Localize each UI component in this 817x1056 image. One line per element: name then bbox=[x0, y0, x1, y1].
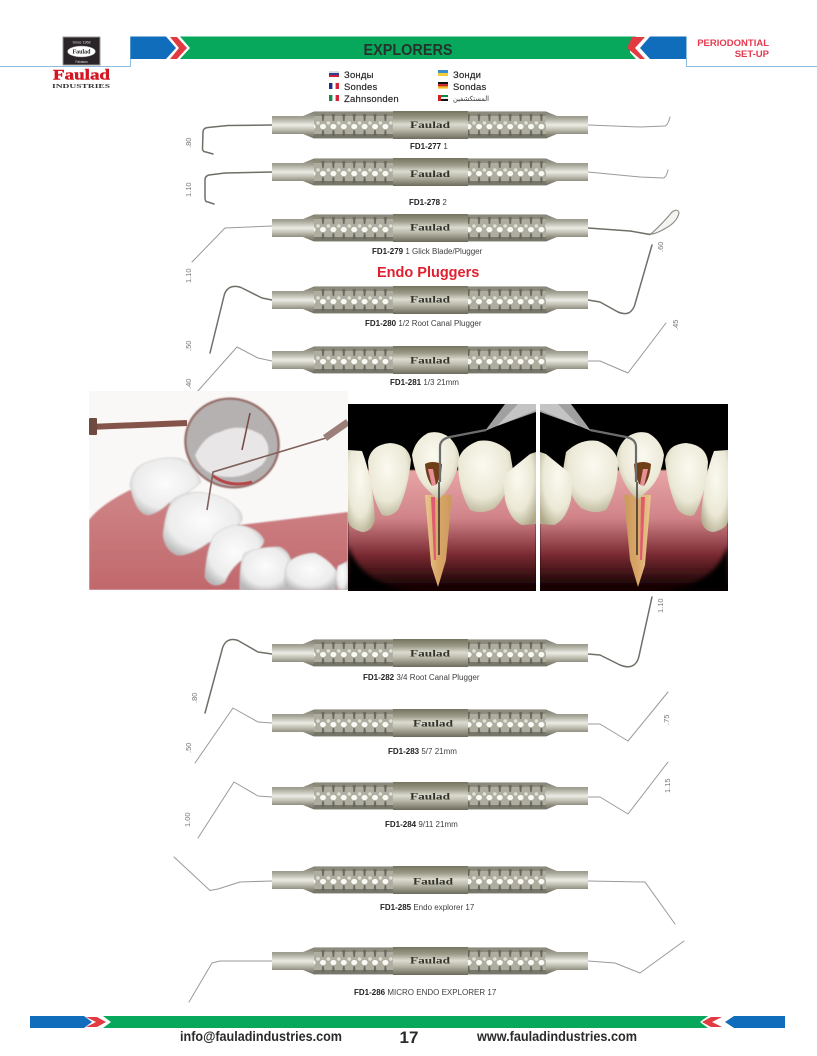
instrument FD1-282: Faulad bbox=[410, 650, 451, 660]
label: Ukrainian: Зонди bbox=[453, 70, 481, 81]
dimension 1.10: 1.10 bbox=[184, 268, 193, 283]
dimension .80: .80 bbox=[184, 138, 193, 148]
instrument FD1-283 bbox=[195, 692, 668, 763]
caption FD1-282: FD1-282 3/4 Root Canal Plugger bbox=[363, 673, 480, 682]
caption FD1-277: FD1-277 1 bbox=[410, 142, 448, 151]
logo badge: Pakistan bbox=[75, 60, 88, 64]
logo badge: Faulad bbox=[72, 50, 91, 56]
reflected probe tip bbox=[242, 413, 250, 450]
dimension 1.10: 1.10 bbox=[656, 598, 665, 613]
legend: translations bbox=[329, 70, 489, 105]
caption FD1-286: FD1-286 MICRO ENDO EXPLORER 17 bbox=[354, 988, 497, 997]
instrument FD1-278 bbox=[205, 158, 668, 204]
photo: dental mirror and explorer on molars bbox=[89, 386, 348, 590]
dimension 1.15: 1.15 bbox=[663, 778, 672, 793]
page number: 17 bbox=[400, 1028, 418, 1047]
molar teeth bbox=[130, 458, 348, 590]
caption FD1-280: FD1-280 1/2 Root Canal Plugger bbox=[365, 319, 482, 328]
instrument FD1-282 bbox=[205, 597, 652, 713]
logo subtitle: INDUSTRIES bbox=[52, 83, 111, 90]
dimension .45: .45 bbox=[671, 320, 680, 330]
flag: France bbox=[329, 83, 339, 89]
caption FD1-279: FD1-279 1 Glick Blade/Plugger bbox=[372, 247, 483, 256]
flag: Italy bbox=[329, 95, 339, 101]
mirror reflection bbox=[195, 428, 268, 477]
logo badge: Since 1968 bbox=[73, 40, 90, 44]
instrument FD1-281: Faulad bbox=[410, 356, 451, 366]
dimension .50: .50 bbox=[184, 341, 193, 351]
dimension 1.10: 1.10 bbox=[184, 182, 193, 197]
flag: Ukraine bbox=[438, 70, 448, 76]
instrument FD1-277 bbox=[202, 111, 670, 154]
caption FD1-278: FD1-278 2 bbox=[409, 198, 447, 207]
instrument FD1-280: Faulad bbox=[410, 296, 451, 306]
header band right bbox=[626, 36, 817, 66]
instrument FD1-284 bbox=[198, 762, 668, 838]
mirror bbox=[183, 396, 281, 490]
instrument FD1-280 bbox=[210, 245, 652, 353]
flag: UAE bbox=[438, 95, 448, 101]
footer email: info@fauladindustries.com bbox=[180, 1028, 342, 1044]
mirror rim accent bbox=[213, 476, 252, 484]
label: Arabic: المستكشفين bbox=[453, 95, 489, 103]
dimension .80: .80 bbox=[190, 693, 199, 703]
dimension .40: .40 bbox=[184, 379, 193, 389]
label: Spanish: Sondas bbox=[453, 82, 486, 93]
instrument FD1-286: Faulad bbox=[410, 956, 451, 966]
instrument FD1-278: Faulad bbox=[410, 170, 451, 180]
label: Russian: Зонды bbox=[344, 70, 374, 81]
explorer handle bbox=[325, 422, 348, 438]
mirror handle bbox=[89, 423, 187, 427]
logo wordmark: Faulad bbox=[53, 68, 111, 84]
section tag: SET-UP bbox=[735, 49, 770, 60]
section heading: Endo Pluggers: Endo Pluggers bbox=[377, 265, 479, 281]
instrument FD1-285 bbox=[174, 857, 675, 924]
footer band bbox=[30, 1016, 785, 1028]
logo bbox=[52, 37, 111, 90]
flag: Germany bbox=[438, 82, 448, 89]
gum bbox=[89, 490, 348, 590]
section tag: PERIODONTIAL bbox=[697, 38, 769, 49]
label: French: Sondes bbox=[344, 82, 377, 93]
caption FD1-281: FD1-281 1/3 21mm bbox=[390, 378, 459, 387]
footer website: www.fauladindustries.com bbox=[476, 1028, 637, 1044]
logo badge bbox=[63, 37, 100, 65]
header band left bbox=[0, 36, 630, 66]
instrument FD1-286 bbox=[189, 941, 684, 1002]
dimension .75: .75 bbox=[662, 715, 671, 725]
caption FD1-283: FD1-283 5/7 21mm bbox=[388, 747, 457, 756]
illustration: root canal, left panel bbox=[348, 404, 536, 591]
instrument FD1-279: Faulad bbox=[410, 224, 451, 234]
title: EXPLORERS bbox=[364, 42, 452, 59]
explorer bbox=[207, 438, 326, 510]
instrument FD1-283: Faulad bbox=[413, 720, 454, 730]
instrument FD1-285: Faulad bbox=[413, 878, 454, 888]
instrument FD1-281 bbox=[197, 323, 666, 392]
instrument FD1-284: Faulad bbox=[410, 792, 451, 802]
instrument FD1-279 bbox=[192, 210, 679, 262]
caption FD1-284: FD1-284 9/11 21mm bbox=[385, 820, 458, 829]
dimension .60: .60 bbox=[656, 242, 665, 252]
caption FD1-285: FD1-285 Endo explorer 17 bbox=[380, 903, 475, 912]
label: German: Zahnsonden bbox=[344, 94, 399, 105]
dimension 1.00: 1.00 bbox=[183, 812, 192, 827]
instrument FD1-277: Faulad bbox=[410, 121, 451, 131]
illustration: root canal, right panel bbox=[540, 404, 728, 591]
flag: Russia bbox=[329, 71, 339, 77]
dimension .50: .50 bbox=[184, 743, 193, 753]
